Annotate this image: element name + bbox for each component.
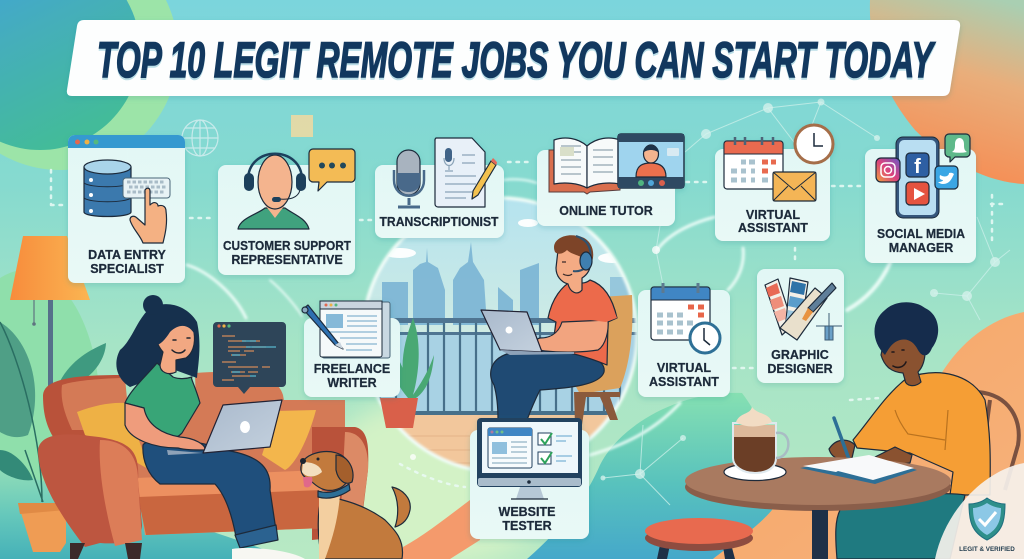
table top bbox=[685, 463, 951, 511]
icon: microphone bbox=[394, 150, 424, 207]
card: website tester bbox=[470, 418, 589, 539]
label bbox=[314, 362, 390, 390]
sofa legs bbox=[70, 543, 142, 559]
dog bbox=[300, 452, 410, 559]
legs bbox=[143, 440, 277, 537]
blob: right orange bbox=[713, 312, 1024, 559]
scene: balcony circle bbox=[360, 198, 640, 475]
label bbox=[223, 239, 351, 267]
tongue bbox=[303, 477, 312, 487]
torso bbox=[548, 280, 617, 365]
pen bbox=[834, 418, 850, 462]
icon: instagram bbox=[876, 158, 900, 182]
icon: database bbox=[84, 160, 131, 216]
label: FREELANCE bbox=[314, 362, 390, 376]
label bbox=[649, 361, 719, 389]
dashed connectors bbox=[51, 162, 1002, 487]
label bbox=[88, 248, 167, 276]
blob: top-left green ring bbox=[0, 0, 178, 170]
icon: facebook: f bbox=[914, 156, 921, 178]
back rest bbox=[43, 375, 125, 440]
card: online tutor bbox=[537, 134, 684, 226]
headset bbox=[573, 236, 591, 271]
collar bbox=[318, 484, 350, 498]
features bbox=[172, 338, 190, 353]
network lines bbox=[603, 102, 1010, 505]
card: virtual assistant lower bbox=[638, 283, 730, 397]
saucer bbox=[724, 464, 786, 480]
title banner bbox=[67, 20, 960, 96]
card: graphic designer bbox=[757, 269, 844, 383]
left arm bbox=[38, 434, 142, 547]
arm bbox=[535, 320, 608, 352]
sofa bbox=[38, 372, 368, 559]
hand right bbox=[873, 447, 912, 464]
icon: shield bbox=[969, 498, 1005, 540]
icon: pen bbox=[302, 305, 343, 349]
man in red shirt bbox=[481, 235, 632, 425]
fringe bbox=[156, 317, 196, 345]
icon: document and pencil bbox=[435, 138, 497, 207]
label: WEBSITE bbox=[499, 505, 555, 519]
potted plant bbox=[380, 318, 434, 428]
chair bbox=[978, 392, 1019, 490]
scene: cafe table and writer bbox=[685, 302, 1019, 559]
blob: pale centre bbox=[320, 395, 560, 559]
table pole bbox=[812, 510, 828, 559]
card: freelance writer bbox=[302, 301, 400, 397]
label: TESTER bbox=[502, 519, 552, 533]
card: virtual assistant top bbox=[715, 125, 833, 241]
globe icon bbox=[182, 120, 218, 156]
label: WRITER bbox=[327, 376, 377, 390]
icon: clock bbox=[795, 125, 833, 163]
label: DATA ENTRY bbox=[88, 248, 167, 262]
torso bbox=[125, 363, 200, 440]
sleeve fold bbox=[895, 410, 948, 450]
shoes bbox=[232, 548, 305, 559]
head bbox=[556, 243, 591, 293]
label bbox=[877, 227, 965, 255]
icon: video call bbox=[618, 134, 684, 188]
laptop bbox=[203, 400, 282, 453]
hair bbox=[116, 304, 199, 387]
chest bbox=[319, 490, 340, 559]
balcony railing bbox=[378, 318, 637, 468]
icon: clock bbox=[690, 323, 720, 353]
blob: top-right orange bbox=[870, 0, 1024, 184]
icon: envelope bbox=[773, 172, 816, 201]
blob: lower-left teal bbox=[0, 470, 290, 559]
head bbox=[301, 452, 350, 490]
coffee cup bbox=[733, 425, 776, 472]
icon: calendar bbox=[651, 283, 710, 340]
back fill bbox=[120, 400, 345, 482]
right arm bbox=[312, 427, 368, 540]
ear bbox=[336, 455, 353, 483]
neck and head bbox=[881, 336, 925, 386]
card: social media manager bbox=[865, 134, 976, 263]
hair bbox=[554, 235, 593, 264]
icon: calendar bbox=[724, 137, 783, 189]
stool bbox=[645, 518, 753, 559]
icon: agent with headset bbox=[238, 154, 309, 229]
blob: green-teal lower-centre bbox=[527, 393, 777, 559]
icon: open book bbox=[549, 138, 620, 194]
icon: phone bbox=[896, 137, 939, 218]
whipped cream bbox=[736, 407, 772, 426]
card: data entry specialist bbox=[68, 135, 185, 283]
jeans cuff bbox=[235, 525, 278, 548]
icon: youtube bbox=[906, 182, 929, 205]
label: GRAPHIC bbox=[771, 348, 829, 362]
circle ring bbox=[363, 198, 637, 472]
icon: paintbrush and pen bbox=[802, 283, 842, 340]
chair bbox=[575, 295, 632, 394]
clouds bbox=[384, 219, 626, 263]
card: transcriptionist bbox=[375, 138, 504, 238]
label bbox=[738, 208, 808, 235]
glowing arcs bbox=[187, 179, 890, 455]
label: SPECIALIST bbox=[90, 262, 164, 276]
muzzle bbox=[302, 462, 322, 476]
face features bbox=[892, 350, 906, 367]
legs bbox=[836, 494, 965, 559]
laptop bbox=[481, 310, 542, 352]
card: customer support representative bbox=[218, 149, 355, 275]
label: MANAGER bbox=[889, 241, 953, 255]
woman with laptop bbox=[116, 295, 305, 559]
icon: keyboard and hand bbox=[123, 178, 170, 243]
label: DESIGNER bbox=[767, 362, 833, 376]
blob: bottom orange band bbox=[402, 500, 480, 559]
label: CUSTOMER SUPPORT bbox=[223, 239, 351, 253]
body bbox=[318, 495, 403, 559]
blob: top-left blue circle bbox=[0, 0, 140, 150]
skyline bbox=[382, 242, 632, 325]
label: ASSISTANT bbox=[649, 375, 719, 389]
decorative square bbox=[291, 115, 313, 137]
icon: snapchat bbox=[945, 134, 970, 162]
arm bbox=[125, 403, 205, 450]
tail bbox=[392, 487, 410, 527]
sleeve bbox=[590, 290, 617, 322]
icon: web page bbox=[320, 301, 390, 358]
balcony interior bbox=[378, 219, 637, 468]
network nodes bbox=[410, 98, 1000, 480]
sweater bbox=[853, 373, 990, 495]
legs bbox=[491, 350, 604, 420]
face bbox=[562, 262, 572, 276]
label bbox=[499, 505, 555, 533]
label: VIRTUAL bbox=[657, 361, 711, 375]
badge: legit and verified bbox=[935, 463, 1024, 559]
icon: twitter bbox=[935, 166, 958, 189]
label: TRANSCRIPTIONIST bbox=[380, 215, 499, 229]
neck and face bbox=[157, 322, 195, 374]
icon: speech bubble bbox=[309, 149, 355, 191]
label: REPRESENTATIVE bbox=[231, 253, 343, 267]
plant: left bbox=[0, 322, 106, 552]
hand left bbox=[829, 440, 855, 460]
label: LEGIT & VERIFIED bbox=[959, 546, 1015, 553]
floor lamp bbox=[10, 236, 90, 400]
label: SOCIAL MEDIA bbox=[877, 227, 965, 241]
cushions bbox=[77, 403, 150, 470]
label: VIRTUAL bbox=[746, 208, 800, 222]
notebook bbox=[800, 456, 917, 484]
code window bubble bbox=[213, 322, 286, 394]
hair bbox=[874, 302, 938, 355]
label bbox=[767, 348, 833, 376]
label: ONLINE TUTOR bbox=[559, 204, 653, 218]
blob: left green bbox=[0, 270, 100, 550]
icon: colour swatches bbox=[765, 278, 827, 340]
label: ASSISTANT bbox=[738, 221, 808, 235]
icon: monitor bbox=[477, 418, 582, 499]
seat bbox=[136, 470, 325, 535]
